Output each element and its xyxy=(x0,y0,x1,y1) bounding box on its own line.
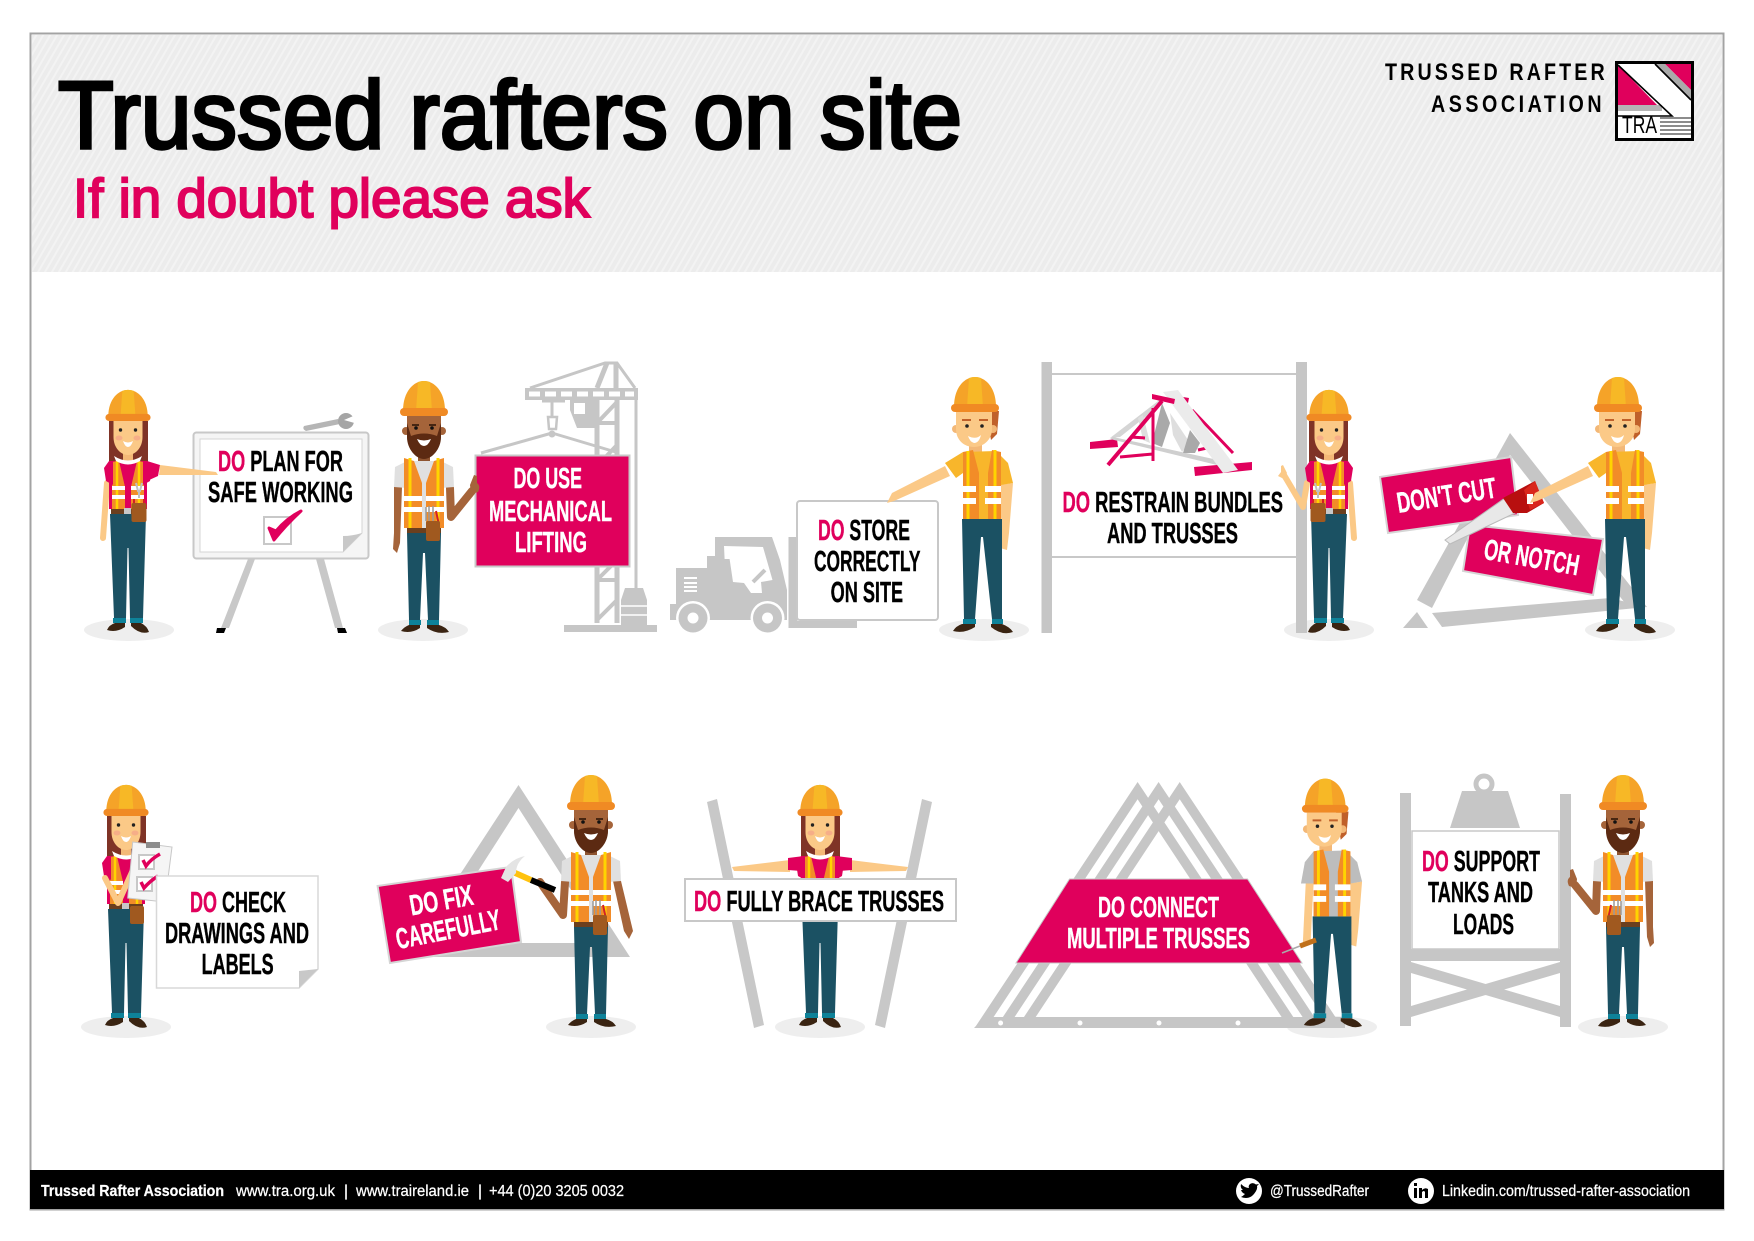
stand frame xyxy=(1400,793,1571,1027)
sign: MECHANICAL xyxy=(489,496,612,528)
ground shadow xyxy=(1287,1016,1377,1038)
sign posts and board xyxy=(1042,362,1307,633)
truss outline xyxy=(1403,433,1647,628)
subtitle: If in doubt please ask xyxy=(73,167,590,229)
sign: DO FULLY BRACE TRUSSES xyxy=(694,886,944,918)
ground shadow xyxy=(775,1016,865,1038)
truss bundle illustration xyxy=(1090,390,1252,476)
ground shadow xyxy=(1585,619,1675,641)
header band xyxy=(32,35,1722,272)
ground shadow xyxy=(1578,1016,1668,1038)
ground shadow xyxy=(939,619,1029,641)
figure: man with hammer xyxy=(540,775,633,1027)
sign: DO SUPPORT xyxy=(1422,846,1540,878)
figure: woman with arms out xyxy=(732,785,908,1028)
sign: don't cut xyxy=(1380,457,1518,533)
figure: man with screwdriver xyxy=(1301,779,1362,1027)
icon: checkbox xyxy=(264,511,301,544)
sign: DO STORE xyxy=(818,515,910,547)
icon: weight xyxy=(1450,776,1520,828)
footer contact text: www.tra.org.uk xyxy=(235,1183,335,1200)
truss outline xyxy=(406,785,630,957)
figure: woman with clipboard xyxy=(102,785,150,1028)
sign: CORRECTLY xyxy=(814,546,920,578)
panel: don't cut or notch xyxy=(1380,377,1675,641)
association name: ASSOCIATION xyxy=(1431,90,1602,117)
footer contact text: www.traireland.ie xyxy=(355,1183,469,1200)
twitter handle: @TrussedRafter xyxy=(1270,1183,1369,1200)
panel: do use mechanical lifting xyxy=(378,363,657,641)
sign xyxy=(476,456,630,566)
panel: do check drawings and labels xyxy=(81,785,318,1038)
footer contact text: +44 (0)20 3205 0032 xyxy=(489,1183,624,1200)
sign: ON SITE xyxy=(831,577,903,609)
footer contact text xyxy=(41,1183,624,1200)
panel: do plan for safe working xyxy=(84,390,368,641)
sign: or notch xyxy=(1463,525,1603,595)
ground shadow xyxy=(84,619,174,641)
figure: man pointing at sign xyxy=(887,377,1013,633)
whiteboard sign: DO PLAN FOR xyxy=(218,446,343,478)
panel: do fix carefully xyxy=(378,775,636,1038)
panel: do fully brace trusses xyxy=(685,785,956,1038)
association name: TRUSSED RAFTER xyxy=(1385,58,1605,85)
ground shadow xyxy=(81,1016,171,1038)
footer contact text: Trussed Rafter Association xyxy=(41,1183,224,1200)
sign xyxy=(1016,879,1302,963)
icon: linkedin xyxy=(1408,1178,1434,1204)
whiteboard sign xyxy=(194,432,368,558)
sign xyxy=(378,867,521,963)
sign: MULTIPLE TRUSSES xyxy=(1067,923,1250,955)
sign: LIFTING xyxy=(515,527,587,559)
sign: DRAWINGS AND xyxy=(165,918,309,950)
footer xyxy=(30,1170,1724,1209)
figure: man with thumb up xyxy=(1568,775,1654,1027)
panel: do store correctly on site xyxy=(670,377,1029,641)
panel: do connect multiple trusses xyxy=(974,779,1377,1038)
sign: LABELS xyxy=(202,949,274,981)
linkedin address: Linkedin.com/trussed-rafter-association xyxy=(1442,1183,1690,1200)
figure: woman pointing xyxy=(103,390,218,633)
sign text xyxy=(1062,487,1283,550)
footer contact text: | xyxy=(478,1183,482,1200)
sign: DO CHECK xyxy=(190,887,286,919)
figure: woman waving xyxy=(1278,390,1354,633)
sign: LOADS xyxy=(1453,909,1514,941)
ground shadow xyxy=(1284,619,1374,641)
whiteboard sign: SAFE WORKING xyxy=(208,477,353,509)
sign: or notch: OR NOTCH xyxy=(1482,534,1582,582)
sign xyxy=(797,501,938,620)
icon: saw xyxy=(1445,481,1544,544)
sign: DO USE xyxy=(514,463,582,495)
sign text: DO RESTRAIN BUNDLES xyxy=(1062,487,1283,519)
icon: twitter xyxy=(1236,1178,1262,1204)
sign: CAREFULLY xyxy=(393,904,503,956)
ground shadow xyxy=(546,1016,636,1038)
icon: hammer xyxy=(501,856,555,890)
sign xyxy=(1412,831,1559,949)
forklift xyxy=(670,537,857,635)
figure: man with saw xyxy=(1530,377,1656,633)
easel legs xyxy=(216,559,347,633)
panel: do restrain bundles and trusses xyxy=(1042,362,1374,641)
logo: TRA xyxy=(1622,112,1657,139)
sign: DO FIX xyxy=(407,880,476,922)
brace bars xyxy=(707,799,932,1028)
logo xyxy=(1616,62,1692,140)
sign: don't cut: DON'T CUT xyxy=(1395,472,1499,520)
sign xyxy=(685,879,956,921)
footer contact text: | xyxy=(344,1183,348,1200)
icon: clipboard xyxy=(128,842,172,902)
icon: wrench xyxy=(303,413,358,431)
figure: man with thumb up xyxy=(393,381,479,633)
sign: DO CONNECT xyxy=(1098,892,1219,924)
sign xyxy=(156,876,318,988)
ground shadow xyxy=(378,619,468,641)
sign text: AND TRUSSES xyxy=(1107,518,1238,550)
sign: TANKS AND xyxy=(1428,877,1533,909)
title: Trussed rafters on site xyxy=(58,62,962,169)
panel: do support tanks and loads xyxy=(1400,775,1668,1038)
icon: screwdriver xyxy=(1282,940,1316,953)
triple truss xyxy=(974,782,1345,1028)
association name xyxy=(1385,58,1605,117)
crane xyxy=(481,363,657,632)
